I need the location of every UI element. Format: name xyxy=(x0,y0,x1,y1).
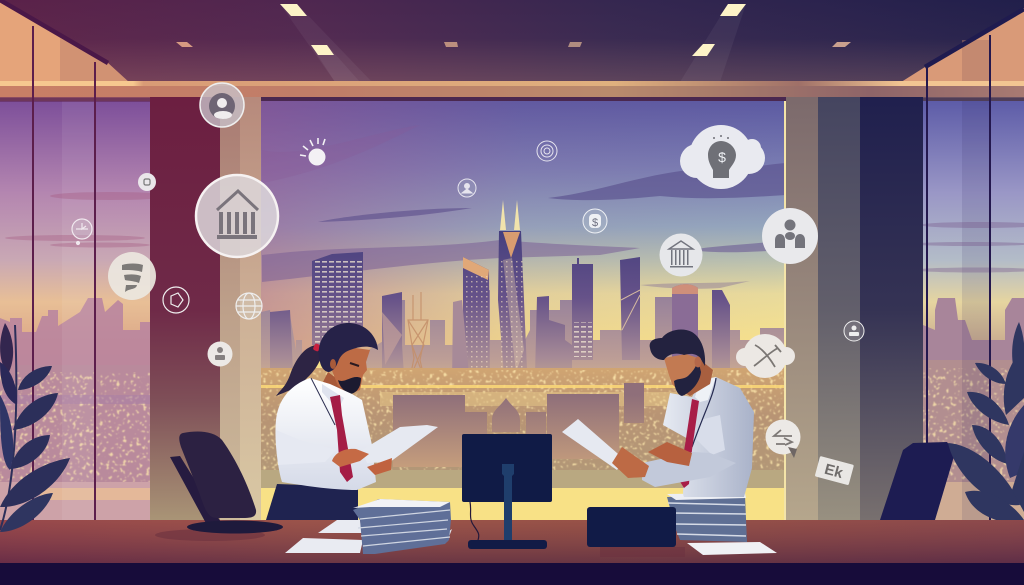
floating icon: bank small xyxy=(660,234,702,276)
hair xyxy=(650,330,705,366)
floating icon: globe clock xyxy=(72,219,92,244)
right plant xyxy=(948,322,1024,520)
hair xyxy=(319,323,378,372)
ceiling xyxy=(0,0,1024,86)
tie xyxy=(679,399,699,488)
floating icon: fingerprint xyxy=(537,141,557,161)
trousers xyxy=(266,484,358,520)
left chair xyxy=(170,431,283,534)
clouds left xyxy=(5,192,150,248)
neck xyxy=(322,372,352,398)
ear xyxy=(330,359,336,369)
shirt xyxy=(663,377,754,497)
floating icon: cloud with dollar bulb xyxy=(680,125,765,189)
shirt xyxy=(275,378,376,490)
ponytail xyxy=(276,345,322,396)
skyline tower: angled xyxy=(382,292,404,368)
central spire xyxy=(498,200,527,375)
floating icon: outline badge xyxy=(163,287,189,313)
left column xyxy=(150,97,261,520)
clouds xyxy=(262,163,784,289)
floating icon: person badge xyxy=(200,83,244,127)
skyline tower: far right xyxy=(712,290,730,370)
ear xyxy=(694,356,702,368)
skyline tower: wide left xyxy=(312,252,363,345)
lattice tower xyxy=(408,292,428,378)
floating icon: globe xyxy=(236,293,262,319)
floating icon: cloud with dollar bulb: $ xyxy=(718,149,726,165)
floating icon: small person outline xyxy=(458,179,476,197)
lower city xyxy=(261,368,784,470)
left plant xyxy=(0,323,70,532)
floating icon: dollar outline xyxy=(583,209,607,233)
right column xyxy=(786,97,923,520)
distant buildings right xyxy=(923,298,1024,360)
right paper stack xyxy=(667,493,777,555)
beard xyxy=(338,377,361,394)
paper xyxy=(362,425,438,463)
eye xyxy=(350,363,359,366)
ceiling lights xyxy=(176,4,851,56)
right glass wall xyxy=(898,8,1024,520)
skyline tower: gold crown xyxy=(463,257,490,368)
left paper stack xyxy=(285,499,452,554)
neck xyxy=(680,358,713,396)
floating icon: person dot xyxy=(208,342,232,366)
floating icon: sun xyxy=(300,138,326,166)
monitor xyxy=(462,434,552,549)
beard xyxy=(674,360,701,396)
floating icon: large bank xyxy=(196,175,278,257)
floating icon: person outline right xyxy=(844,321,864,341)
skyline tower: pink cap xyxy=(655,284,698,360)
floating icon: spiral badge xyxy=(108,252,156,300)
tie xyxy=(330,395,353,482)
distant buildings left xyxy=(0,298,150,365)
tablet box xyxy=(587,507,676,547)
right chair xyxy=(880,442,955,520)
floating icon: small badge xyxy=(138,173,156,191)
hands xyxy=(332,449,369,467)
face xyxy=(331,345,370,394)
desk xyxy=(0,520,1024,585)
floating label: Ek: Ek xyxy=(823,461,845,482)
left person xyxy=(266,323,438,520)
window sky and skyline xyxy=(261,101,786,520)
paper xyxy=(562,419,625,470)
floating label: Ek xyxy=(815,456,854,485)
floating icon: cloud with tools xyxy=(736,334,795,378)
hands xyxy=(612,447,649,478)
foreground buildings xyxy=(393,383,644,467)
floating icon: dollar outline: $ xyxy=(592,217,598,229)
face xyxy=(664,354,700,396)
arm xyxy=(642,452,736,487)
skyline tower: cracked glass xyxy=(620,257,640,360)
window frame shine xyxy=(784,101,786,520)
right person xyxy=(562,330,754,497)
skyline tower: twin-top xyxy=(572,258,593,360)
skyline tower: left small xyxy=(270,310,293,372)
beam xyxy=(0,81,1024,101)
floating icon: people group xyxy=(762,208,818,264)
floating icon: speech arrows xyxy=(766,420,800,458)
left glass wall xyxy=(0,2,150,520)
back buildings xyxy=(261,290,784,368)
